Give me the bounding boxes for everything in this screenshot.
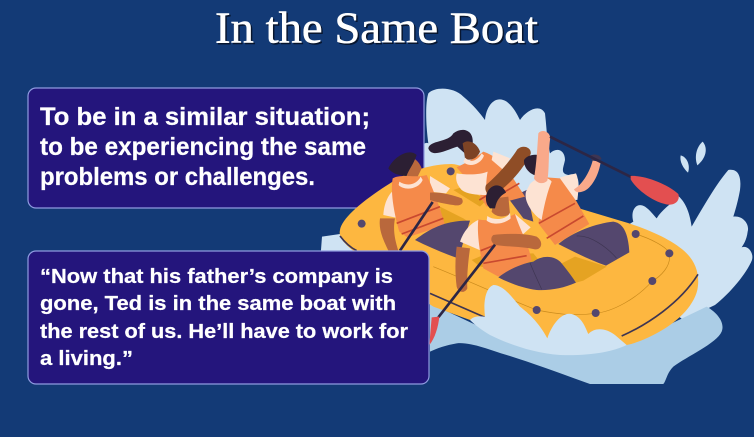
quote text [40,266,408,370]
raft hull [340,164,698,345]
paddler: front man [429,185,576,345]
paddler: back right man [524,131,629,266]
example quote box [28,251,429,384]
title: In the Same Boat [215,4,538,52]
raft bench shadows [440,187,607,283]
droplets [680,142,706,173]
quote text: the rest of us. He’ll have to work for [40,321,408,343]
splash: right foam [620,170,752,320]
paddle: right paddle [550,137,679,205]
illustration: raft with paddlers [340,130,698,355]
quote text: gone, Ted is in the same boat with [40,293,396,315]
paddler: left man [380,152,470,258]
definition text: problems or challenges. [40,163,315,191]
definition box [28,88,424,208]
definition text: to be experiencing the same [40,133,366,161]
paddler: back left woman [428,130,533,222]
water: lower pool [430,303,723,384]
definition text [40,103,370,191]
splash: rear foam [418,89,579,207]
raft grommets [358,167,673,317]
title: In the Same Boat [216,5,540,54]
quote text: a living.” [40,348,133,370]
quote text: “Now that his father’s company is [40,266,393,288]
splash: left foam [320,234,400,263]
splash: front foam [470,285,627,355]
water splash behind boat [320,89,752,384]
raft ropes [340,236,698,336]
raft seam [433,234,670,315]
definition text: To be in a similar situation; [40,103,370,131]
